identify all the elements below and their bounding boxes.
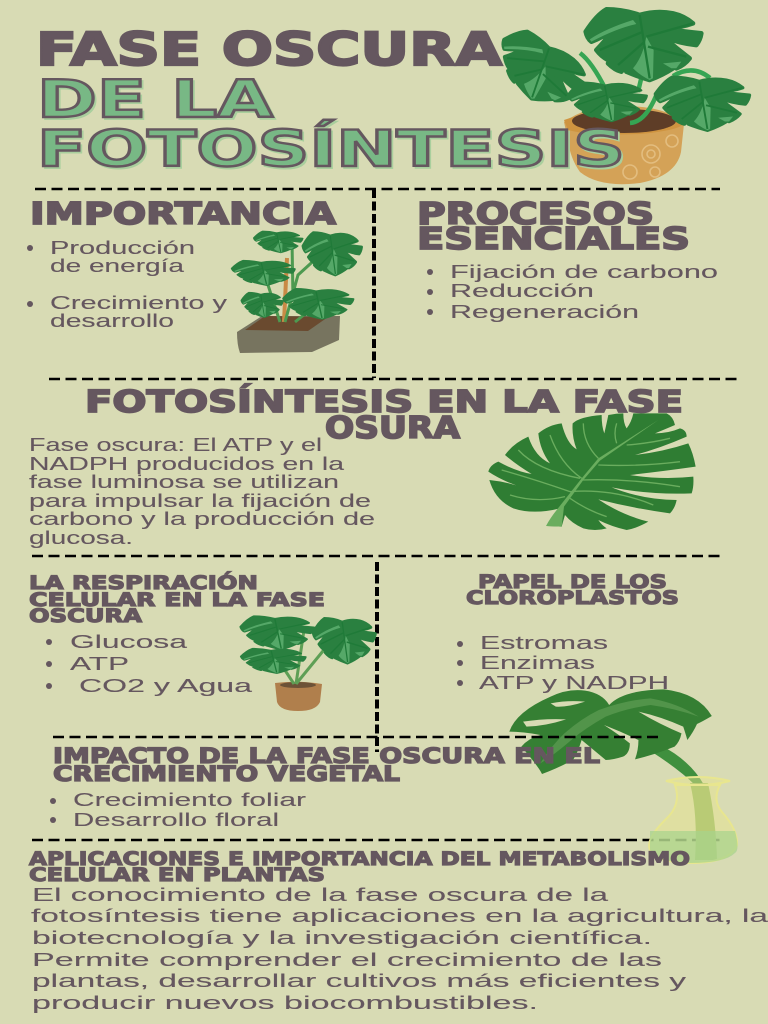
text block: aplicaciones: plantas, desarrollar cultivos más eficientes y — [32, 971, 686, 991]
illustration: leaf in glass vase — [509, 689, 738, 863]
panel: impacto en el crecimiento vegetal — [50, 737, 660, 830]
heading: respiración celular — [29, 570, 325, 627]
heading: respiración celular: LA RESPIRACIÓN — [29, 570, 258, 594]
heading: fotosíntesis en la fase osura: FOTOSÍNTESIS EN LA FASE — [85, 384, 683, 420]
title line: fotosíntesis: FOTOSÍNTESIS — [39, 121, 627, 180]
list: procesos: Fijación de carbono — [450, 262, 718, 282]
panel: respiración celular — [29, 570, 376, 711]
heading: procesos esenciales: PROCESOS — [417, 197, 654, 232]
text block: fase oscura: glucosa. — [29, 528, 133, 548]
panel: papel de los cloroplastos — [457, 571, 679, 693]
list: importancia: de energía — [50, 256, 186, 276]
list: impacto — [50, 790, 306, 830]
text block: aplicaciones: Permite comprender el crecimiento de las — [32, 950, 662, 970]
title line: de la — [37, 70, 275, 132]
panel: fotosíntesis en la fase oscura — [29, 384, 696, 548]
illustration: plant in grey planter — [232, 231, 362, 353]
heading: aplicaciones: CELULAR EN PLANTAS — [29, 864, 325, 886]
heading: respiración celular: OSCURA — [29, 605, 142, 627]
panel: procesos esenciales — [417, 197, 718, 322]
list: procesos: Regeneración — [450, 302, 639, 322]
list: cloroplastos: Enzimas — [480, 653, 595, 673]
text block: aplicaciones: biotecnología y la investigación científica. — [32, 928, 652, 948]
list: impacto: Crecimiento foliar — [73, 790, 306, 810]
list: importancia: Producción — [50, 238, 195, 258]
text block: fase oscura: Fase oscura: El ATP y el — [29, 435, 322, 455]
panel: importancia — [27, 197, 362, 353]
list: cloroplastos — [457, 633, 669, 693]
text block: aplicaciones: producir nuevos biocombustibles. — [32, 993, 538, 1013]
text block: aplicaciones: fotosíntesis tiene aplicaciones en la agricultura, la — [31, 906, 768, 926]
heading: cloroplastos: PAPEL DE LOS — [478, 571, 667, 593]
heading: cloroplastos: CLOROPLASTOS — [466, 587, 679, 609]
list: respiración: CO2 y Agua — [79, 676, 254, 696]
text block: fase oscura: fase luminosa se utilizan — [29, 472, 339, 492]
title line: de la: DE LA — [37, 70, 273, 130]
title line: fase oscura: FASE OSCURA — [36, 23, 502, 76]
illustration: plant in basket — [241, 616, 376, 711]
heading: impacto: CRECIMIENTO VEGETAL — [53, 762, 400, 786]
heading: cloroplastos — [466, 571, 679, 609]
heading: importancia: IMPORTANCIA — [30, 197, 337, 232]
title — [36, 23, 627, 180]
illustration: monstera in woven pot — [486, 9, 749, 184]
text block: fase oscura: para impulsar la fijación de — [29, 491, 371, 511]
list: procesos: Reducción — [450, 281, 594, 301]
heading: impacto: IMPACTO DE LA FASE OSCURA EN EL — [53, 744, 600, 768]
list: respiración: Glucosa — [70, 632, 189, 652]
heading: procesos esenciales — [417, 197, 690, 257]
heading: fotosíntesis en la fase osura: OSURA — [325, 411, 461, 446]
list: procesos — [427, 262, 718, 322]
text block: fase oscura: carbono y la producción de — [29, 509, 375, 529]
heading: impacto — [53, 744, 600, 786]
text block: fase oscura: NADPH producidos en la — [29, 454, 346, 474]
title line: fotosíntesis: FOTOSÍNTESIS — [37, 119, 625, 178]
list: importancia — [27, 238, 227, 331]
list: importancia: Crecimiento y — [50, 293, 227, 313]
list: respiración: ATP — [70, 654, 129, 674]
heading: fotosíntesis en la fase osura — [85, 384, 683, 446]
list: cloroplastos: Estromas — [480, 633, 608, 653]
list: cloroplastos: ATP y NADPH — [479, 673, 669, 693]
panel: aplicaciones — [29, 848, 768, 1013]
text block: aplicaciones — [31, 885, 768, 1013]
heading: respiración celular: CELULAR EN LA FASE — [29, 589, 325, 611]
icon: monstera leaf — [488, 413, 696, 530]
text block: aplicaciones: El conocimiento de la fase oscura de la — [32, 885, 610, 905]
heading: aplicaciones: APLICACIONES E IMPORTANCIA DEL METABOLISMO — [29, 848, 690, 870]
list: importancia: desarrollo — [50, 311, 174, 331]
title line: de la: DE LA — [39, 72, 275, 132]
title line: fotosíntesis — [37, 119, 627, 180]
heading: procesos esenciales: ESENCIALES — [417, 222, 690, 257]
list: respiración — [46, 632, 254, 696]
text block: fase oscura — [29, 435, 375, 548]
list: impacto: Desarrollo floral — [73, 810, 279, 830]
heading: aplicaciones — [29, 848, 690, 886]
